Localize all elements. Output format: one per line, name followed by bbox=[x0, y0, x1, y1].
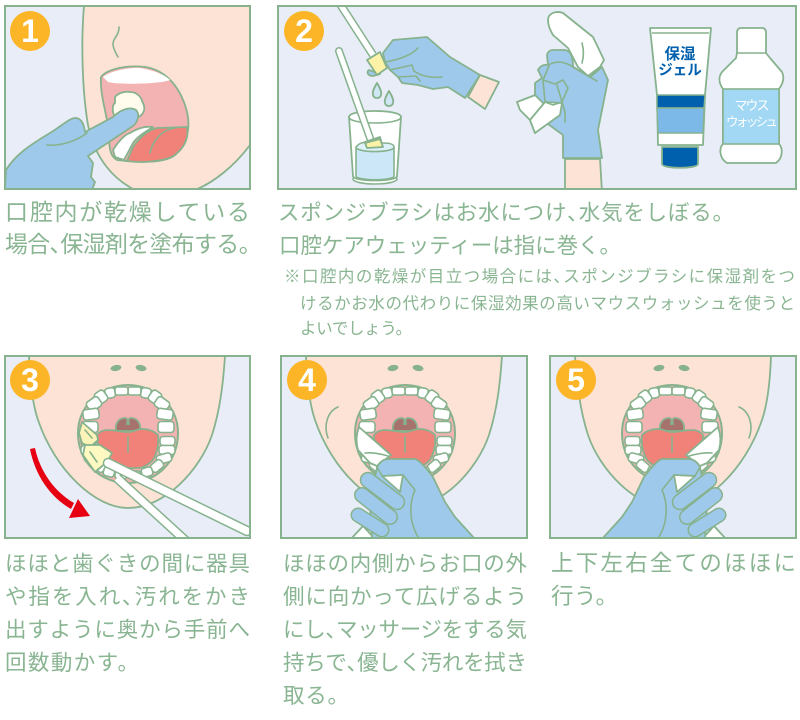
cloth fold line bbox=[582, 43, 584, 63]
face with open mouth bbox=[29, 356, 225, 508]
nose crease bbox=[113, 27, 119, 57]
gel tube bbox=[650, 28, 711, 168]
badge 4: 4 bbox=[298, 362, 316, 398]
badge 3: 3 bbox=[21, 362, 39, 398]
water drops bbox=[373, 83, 393, 106]
forearm bbox=[565, 159, 602, 192]
step 3 text: 出すように奥から手前へ bbox=[5, 618, 250, 642]
step 2 text: スポンジブラシはお水につけ、水気をしぼる。 bbox=[278, 201, 734, 225]
badge 3 bbox=[10, 360, 50, 400]
glass of water bbox=[339, 51, 401, 184]
face in profile bbox=[82, 6, 250, 190]
red arrow bbox=[30, 448, 90, 518]
step 5 text: 上下左右全てのほほに bbox=[551, 551, 796, 576]
sponge bbox=[113, 92, 144, 118]
step 2 note: ※口腔内の乾燥が目立つ場合には、スポンジブラシに保湿剤をつ bbox=[284, 266, 795, 286]
open mouth bbox=[101, 66, 188, 162]
step 3 text: や指を入れ、汚れをかき bbox=[5, 585, 250, 609]
gel tube: 保湿 bbox=[664, 45, 696, 63]
gel tube: ジェル bbox=[658, 63, 702, 79]
panel 1: applying moisturizer bbox=[5, 6, 250, 190]
step 4 text: ほほの内側からお口の外 bbox=[283, 552, 527, 576]
mouthwash bottle: マウス bbox=[734, 98, 770, 113]
mouthwash bottle bbox=[720, 28, 783, 163]
step 1 text bbox=[5, 199, 250, 257]
panel 4: stretching left cheek bbox=[281, 356, 527, 540]
cloth wrapped on finger bbox=[548, 12, 604, 76]
step 2 note: よいでしょう。 bbox=[300, 320, 412, 338]
brush handles bbox=[108, 463, 247, 542]
mouthwash bottle: ウォッシュ bbox=[726, 115, 778, 129]
sponge at cheek bbox=[79, 422, 112, 472]
gloved finger bbox=[5, 108, 138, 190]
gloved fist bbox=[530, 50, 608, 158]
step 3 text: 回数動かす。 bbox=[5, 651, 139, 675]
step 2 note: けるかお水の代わりに保湿効果の高いマウスウォッシュを使うと bbox=[300, 294, 795, 313]
step 4 text: 側に向かって広げるよう bbox=[283, 585, 527, 609]
step 4 text: にし、マッサージをする気 bbox=[283, 618, 527, 642]
step 4 text bbox=[283, 552, 527, 708]
step 3 text bbox=[5, 552, 250, 675]
badge 1 bbox=[10, 11, 50, 51]
sponge brush held over glass bbox=[340, 4, 387, 76]
step 4 text: 取る。 bbox=[283, 684, 349, 708]
step 3 text: ほほと歯ぐきの間に器具 bbox=[5, 552, 250, 576]
badge 4 bbox=[287, 360, 327, 400]
step 5 text bbox=[551, 551, 796, 609]
step 4 text: 持ちで、優しく汚れを拭き bbox=[283, 651, 527, 675]
gloved hand bbox=[383, 37, 480, 98]
badge 5: 5 bbox=[567, 362, 585, 398]
step 5 text: 行う。 bbox=[551, 584, 618, 609]
cloth tail behind fist bbox=[516, 94, 542, 134]
badge 2: 2 bbox=[295, 13, 313, 49]
badge 2 bbox=[284, 11, 324, 51]
panel 5: stretching right cheek bbox=[550, 356, 796, 540]
step 2 note bbox=[284, 266, 795, 338]
panel 3: wiping cheek with brush bbox=[5, 356, 250, 542]
step 2 text: 口腔ケアウェッティーは指に巻く。 bbox=[279, 234, 621, 258]
step 2 text bbox=[278, 201, 734, 258]
step 1 text: 口腔内が乾燥している bbox=[5, 199, 250, 225]
panel 2: preparing tools bbox=[278, 4, 796, 192]
step 1 text: 場合、保湿剤を塗布する。 bbox=[5, 231, 250, 257]
badge 5 bbox=[556, 360, 596, 400]
sleeve bbox=[468, 75, 499, 109]
badge 1: 1 bbox=[21, 13, 39, 49]
